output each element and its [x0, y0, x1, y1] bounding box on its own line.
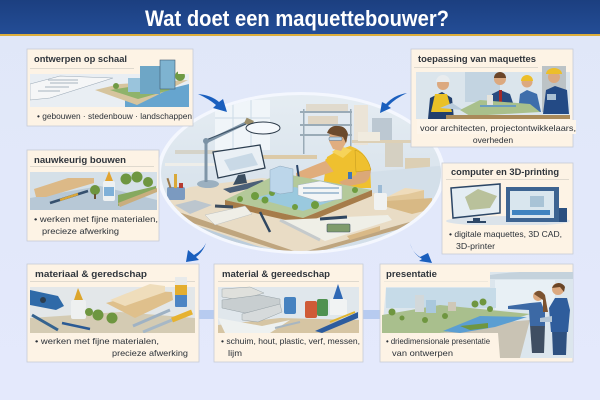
- pencil pot: [167, 174, 185, 200]
- bullet text: • werken met fijne materialen,: [35, 336, 159, 346]
- floor: [390, 166, 441, 234]
- desk: [168, 178, 426, 251]
- illustration: wood, glue, trees: [30, 171, 157, 210]
- arrow: lower right: [410, 243, 432, 263]
- panel: presentatie: van ontwerpen: [392, 348, 453, 358]
- arrow: lower left: [186, 243, 206, 262]
- panel: toepassing van maquettes: overheden: [473, 135, 513, 145]
- bullet text: • schuim, hout, plastic, verf, messen,: [221, 336, 360, 346]
- header banner: [0, 0, 600, 36]
- panel: material en gereedschap: lijm: [228, 348, 242, 358]
- heading: materiaal & geredschap: [35, 269, 147, 280]
- heading: presentatie: [386, 269, 437, 280]
- desk items: [175, 200, 392, 241]
- panel: toepassing van maquettes: voor architecten, projectontwikkelaars,: [420, 123, 576, 133]
- panel: computer en 3D-printing: 3D-printer: [456, 241, 495, 251]
- panel: ontwerpen op schaal: [27, 49, 193, 126]
- arrow: top right: [380, 93, 407, 113]
- panel: materiaal en gereedschap: precieze afwerking: [112, 348, 188, 358]
- panel: computer en 3D-printing: [442, 163, 573, 254]
- illustration: foam, paints, knife: [218, 284, 359, 333]
- illustration: tools and materials: [30, 277, 195, 333]
- illustration: team around a model: [416, 62, 570, 119]
- title: Wat doet een maquettebouwer?: [145, 6, 449, 31]
- arrow: top left: [198, 94, 227, 112]
- man: [296, 126, 371, 188]
- heading: toepassing van maquettes: [418, 54, 536, 65]
- bullet text: • werken met fijne materialen,: [34, 214, 158, 224]
- architectural model: [225, 166, 372, 224]
- description text: [417, 120, 576, 134]
- windows: [215, 100, 270, 150]
- back bench: [352, 140, 411, 143]
- panel: materiaal en gereedschap: [27, 264, 199, 362]
- illustration: monitor and 3D printer: [446, 184, 570, 226]
- heading: material & gereedschap: [222, 269, 330, 280]
- panel: nauwkeurig bouwen: [27, 150, 159, 241]
- central illustration: model maker at work: [155, 90, 450, 260]
- panel: presentatie: [380, 264, 573, 362]
- bullet text: • gebouwen · stedenbouw · landschappen: [37, 111, 192, 121]
- illustration: viewers at city model: [382, 271, 573, 358]
- panel: material en gereedschap: [214, 264, 363, 362]
- glue and wood blocks: [374, 185, 432, 214]
- shelves: [300, 109, 352, 154]
- illustration: blueprints and building model: [30, 60, 189, 107]
- keyboard: [223, 180, 264, 193]
- monitor: [213, 145, 265, 185]
- panel: toepassing van maquettes: [411, 49, 576, 147]
- lamp: [197, 118, 280, 188]
- bullet text: • driedimensionale presentatie: [386, 336, 490, 346]
- panel: nauwkeurig bouwen: precieze afwerking: [42, 226, 119, 236]
- heading: nauwkeurig bouwen: [34, 155, 126, 166]
- bullet text: • digitale maquettes, 3D CAD,: [449, 229, 562, 239]
- heading: ontwerpen op schaal: [34, 54, 127, 65]
- heading: computer en 3D-printing: [451, 167, 559, 178]
- connector strips: [199, 310, 380, 319]
